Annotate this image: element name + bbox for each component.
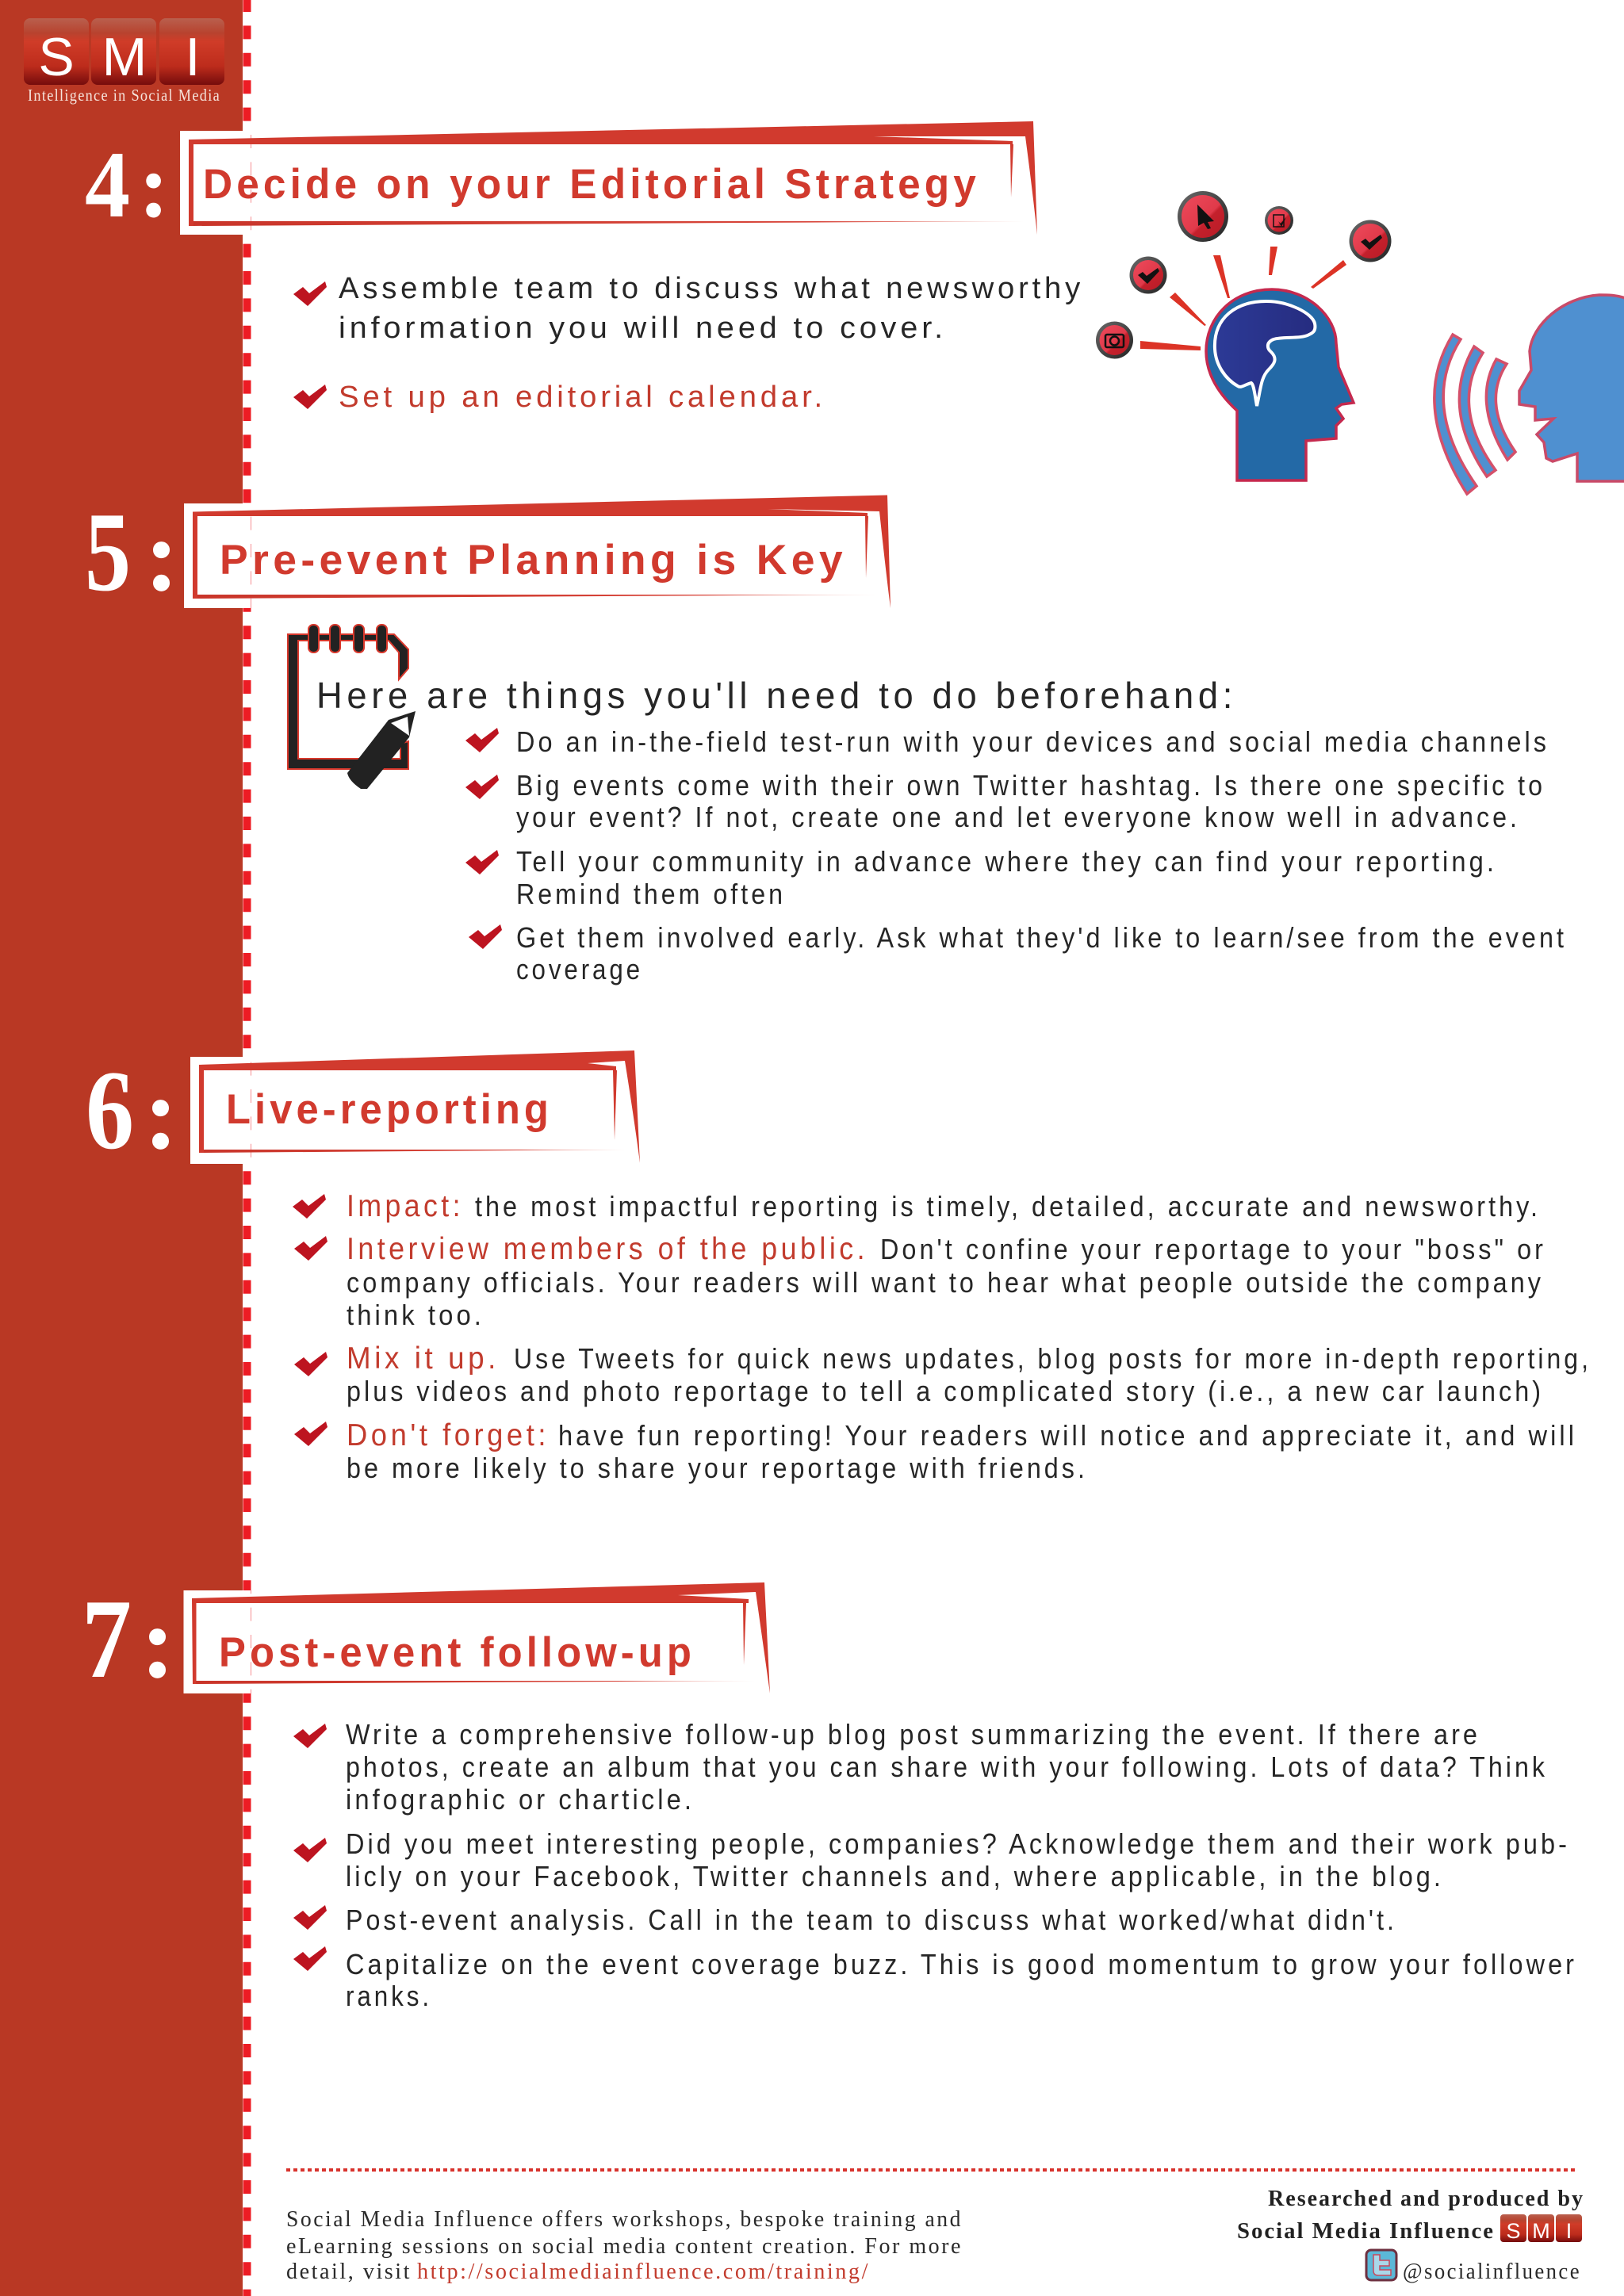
footer: training note [286,2207,963,2284]
icon: cursor button [1178,191,1228,242]
section 7 bullets: Write a comprehensive follow-up blog post summarizing the event. If there are [346,1718,1480,1751]
section 7 bullets [293,1718,1577,2012]
section 6 heading: : [144,1057,178,1171]
footer: credits: Researched and produced by [1268,2187,1584,2211]
icon: camera button [1096,322,1133,358]
section 6 bullets: Interview members of the public. [347,1232,868,1266]
section 7 heading: Post-event follow-up [219,1629,695,1676]
icon: notepad button [1265,206,1293,235]
SMI logo: Intelligence in Social Media [28,86,220,105]
SMI logo: S [38,27,75,87]
section 6 bullets: Don't forget: [347,1418,550,1452]
footer: training note: detail, visit [286,2260,412,2284]
small SMI logo [1500,2214,1582,2243]
section 5 intro line: Here are things you'll need to do beforehand: [316,675,1237,716]
SMI logo [24,18,224,105]
section 6 heading: Live-reporting [226,1086,553,1133]
section 6 bullets: Don't confine your reportage to your "boss" or [880,1233,1546,1265]
section 5 heading [85,489,891,614]
section 6 bullets: think too. [347,1299,485,1331]
red sidebar [0,0,243,2296]
section 5 bullets: Tell your community in advance where they can find your reporting. [516,845,1497,878]
section 5 bullets [465,725,1567,985]
icon: notepad with pencil [288,625,416,789]
icon: check button large [1350,220,1391,262]
icon: twitter [1366,2250,1396,2280]
section 5 bullets: Remind them often [516,878,786,910]
small SMI logo: M [1532,2219,1550,2243]
section 6 heading [86,1047,640,1173]
SMI logo: I [186,27,200,87]
section 4 heading: : [139,136,169,236]
section 7 heading [82,1576,770,1701]
footer: credits [1237,2187,1584,2284]
small SMI logo: S [1506,2219,1521,2243]
footer: training note: http://socialmediainfluence.com/training/ [417,2260,870,2284]
section 6 bullets: be more likely to share your reportage with friends. [347,1452,1088,1484]
footer: training note: eLearning sessions on social media content creation. For more [286,2234,963,2259]
section 4 heading: Decide on your Editorial Strategy [203,161,980,208]
footer: training note: Social Media Influence offers workshops, bespoke training and [286,2207,963,2232]
section 4 heading: 4 [85,132,130,237]
section 5 bullets: your event? If not, create one and let everyone know well in advance. [516,801,1520,833]
section 6 heading: 6 [86,1047,134,1173]
small SMI logo: I [1566,2219,1572,2243]
section 7 heading: 7 [82,1576,132,1701]
illustration: speaking head with sound waves [1434,295,1624,494]
section 6 bullets [293,1189,1591,1484]
section 6 bullets: Mix it up. [347,1341,500,1376]
section 5 heading: 5 [85,489,131,614]
section 5 heading: : [144,499,179,613]
section 4 bullets: information you will need to cover. [339,312,947,345]
section 5 bullets: coverage [516,953,643,985]
section 4 heading [85,121,1037,237]
section 4 bullets: Set up an editorial calendar. [339,381,826,414]
section 7 bullets: licly on your Facebook, Twitter channels and, where applicable, in the blog. [346,1860,1444,1892]
section 7 bullets: infographic or charticle. [346,1783,695,1816]
section 6 bullets: Impact: [347,1189,464,1223]
SMI logo: M [102,27,147,87]
section 7 heading: : [140,1586,175,1700]
section 7 bullets: Post-event analysis. Call in the team to discuss what worked/what didn't. [346,1904,1397,1936]
illustration: thinking head with icons [1096,191,1391,480]
footer: credits: @socialinfluence [1403,2260,1581,2284]
icon: check button [1129,257,1167,293]
section 5 heading: Pre-event Planning is Key [220,537,847,584]
footer: credits: Social Media Influence [1237,2219,1495,2244]
section 7 bullets: ranks. [346,1980,432,2012]
section 4 bullets: Assemble team to discuss what newsworthy [339,272,1084,305]
section 4 bullets [293,272,1084,414]
